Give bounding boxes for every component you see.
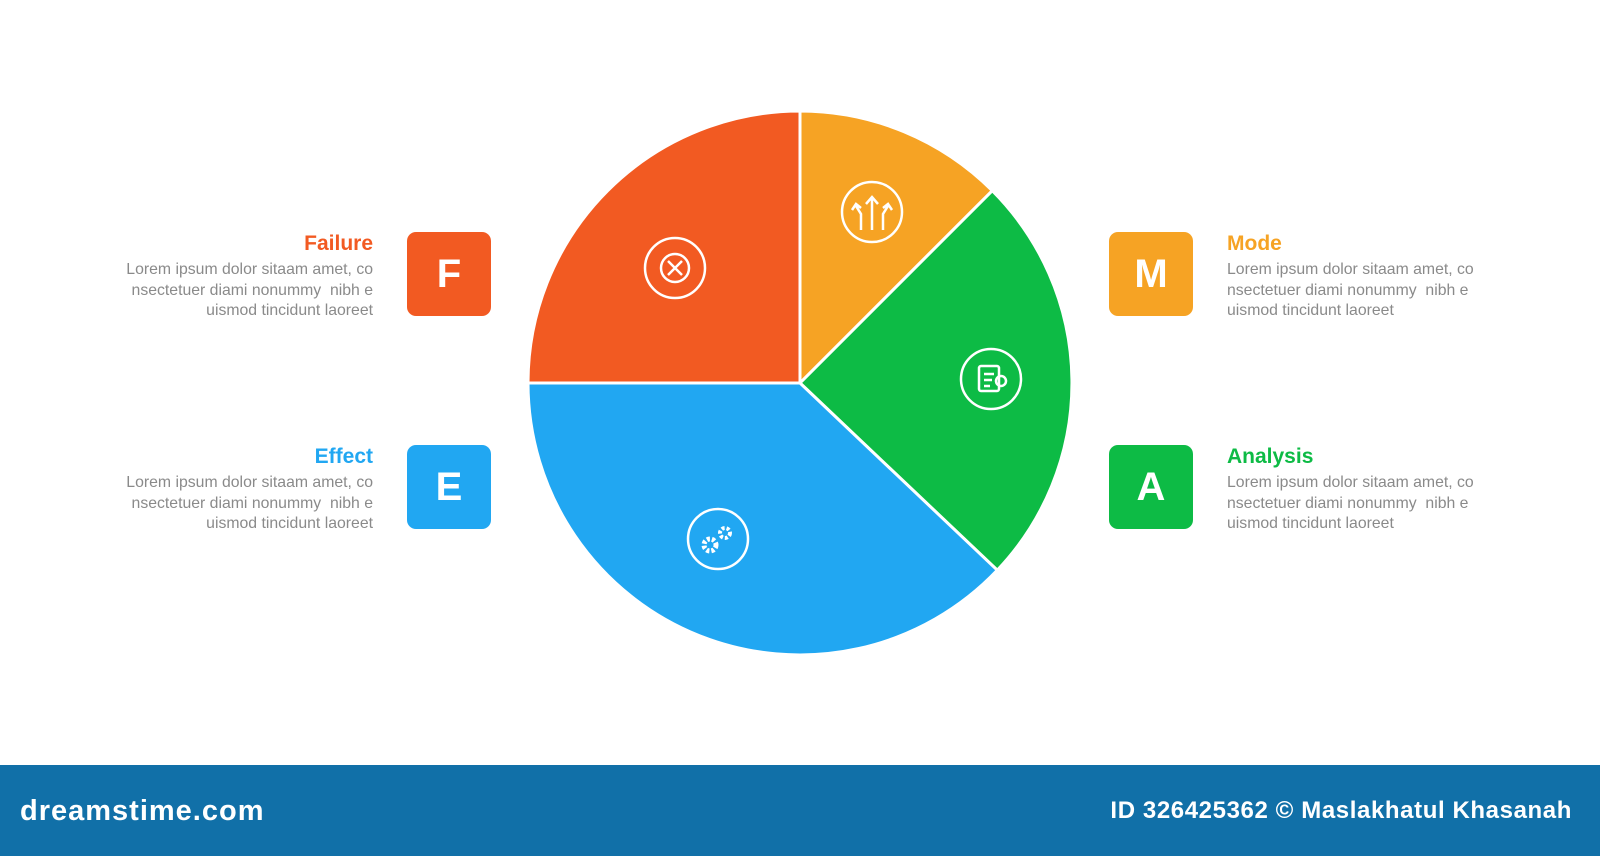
text: analysis: Analysis <box>1227 445 1313 468</box>
footer credit: ID 326425362 © Maslakhatul Khasanah <box>1110 797 1572 824</box>
footer banner <box>0 765 1600 856</box>
icon: x circle <box>645 238 705 298</box>
text: failure: Lorem ipsum dolor sitaam amet, co nsectetuer diami nonummy nibh e uismod tincidunt laoreet <box>126 261 373 319</box>
box E: E <box>436 464 462 508</box>
slice: mode <box>800 111 992 383</box>
text: mode: Mode <box>1227 232 1282 255</box>
text: effect <box>126 445 373 532</box>
box A: A <box>1137 464 1165 508</box>
slice: analysis <box>800 191 1072 570</box>
box F <box>407 232 491 316</box>
box A <box>1109 445 1193 529</box>
footer logo: dreamstime.com <box>20 795 264 827</box>
icon: clipboard <box>961 349 1021 409</box>
box F: F <box>437 252 461 296</box>
box M <box>1109 232 1193 316</box>
text: failure <box>126 232 373 319</box>
text: effect: Effect <box>315 445 373 468</box>
text: analysis <box>1227 445 1474 532</box>
text: mode <box>1227 232 1474 319</box>
text: mode: Lorem ipsum dolor sitaam amet, co nsectetuer diami nonummy nibh e uismod tincidunt laoreet <box>1227 261 1474 319</box>
slice: effect <box>528 383 997 655</box>
text: analysis: Lorem ipsum dolor sitaam amet, co nsectetuer diami nonummy nibh e uismod tincidunt laoreet <box>1227 474 1474 532</box>
icon: gears <box>688 509 748 569</box>
text: effect: Lorem ipsum dolor sitaam amet, co nsectetuer diami nonummy nibh e uismod tincidunt laoreet <box>126 474 373 532</box>
box M: M <box>1134 252 1168 296</box>
box E <box>407 445 491 529</box>
text: failure: Failure <box>304 232 373 255</box>
icon: split arrows <box>842 182 902 242</box>
slice: failure <box>528 111 800 383</box>
